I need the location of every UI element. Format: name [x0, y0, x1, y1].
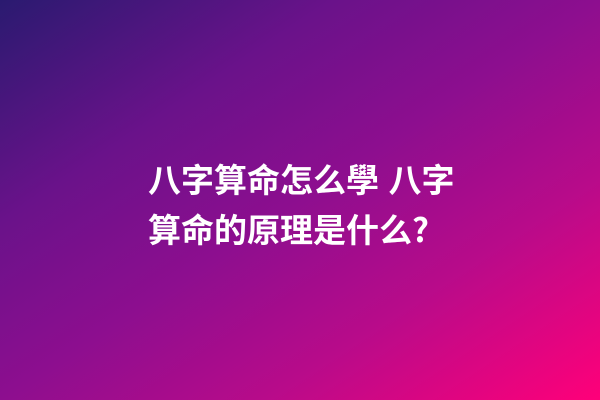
title: 算命的原理是什么? — [148, 204, 429, 252]
title: 八字算命怎么學 八字 — [148, 154, 454, 202]
title — [148, 154, 454, 252]
